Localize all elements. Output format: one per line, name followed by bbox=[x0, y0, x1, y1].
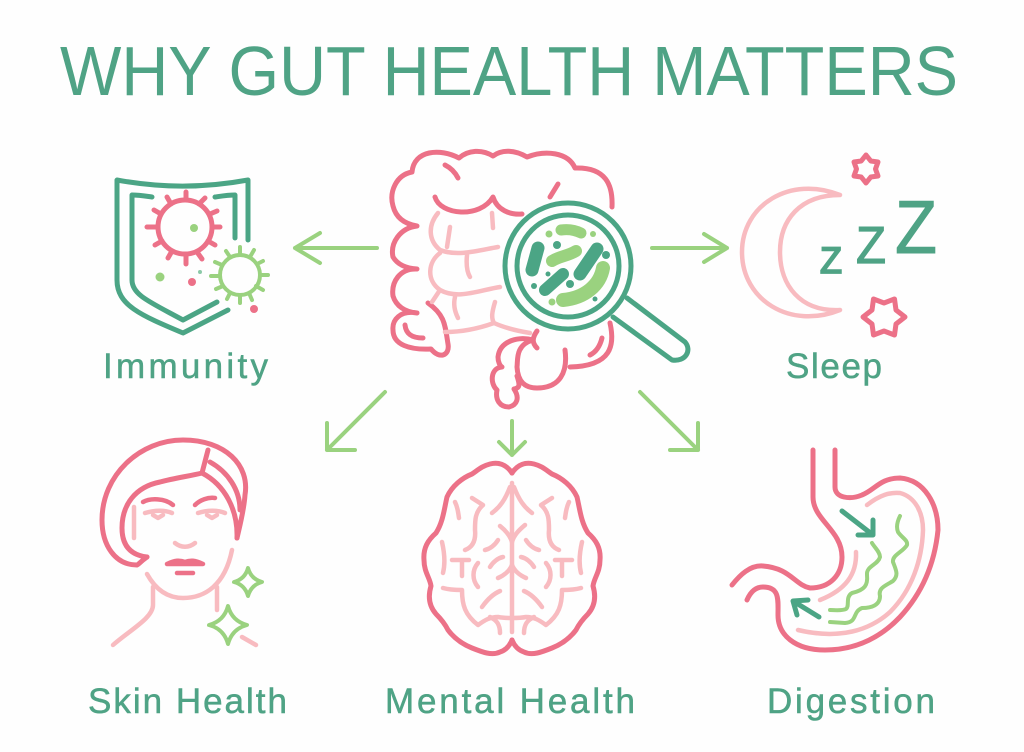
infection dots bbox=[156, 224, 258, 313]
star bottom bbox=[863, 299, 905, 335]
green waves bbox=[830, 516, 907, 623]
star top bbox=[854, 155, 878, 183]
large intestine outer outline bbox=[392, 151, 612, 407]
arrow: to digestion bbox=[640, 392, 698, 450]
label: Sleep: Sleep bbox=[786, 347, 882, 386]
small intestine inner folds bbox=[430, 213, 530, 333]
z letters: Z bbox=[820, 240, 842, 281]
bacteria bbox=[531, 230, 610, 306]
stomach inner lining bbox=[798, 493, 923, 634]
magnifying glass bbox=[505, 203, 688, 360]
icon: face for skin health bbox=[102, 440, 262, 645]
crescent moon bbox=[742, 189, 840, 316]
stomach outline bbox=[732, 450, 938, 650]
sparkles bbox=[209, 568, 262, 644]
icon: sleep moon, stars and z's bbox=[742, 155, 937, 335]
z letters bbox=[820, 185, 937, 281]
brows, nose and mouth bbox=[143, 498, 215, 573]
arrow: to sleep bbox=[652, 234, 727, 262]
label: Digestion: Digestion bbox=[767, 682, 935, 721]
pink virus bbox=[147, 192, 220, 264]
title: WHY GUT HEALTH MATTERS bbox=[60, 32, 958, 110]
green virus bbox=[211, 247, 268, 303]
brain folds bbox=[442, 483, 582, 633]
icon: immunity shield with viruses bbox=[117, 180, 268, 333]
z letters: Z bbox=[856, 217, 886, 275]
icon: brain for mental health bbox=[424, 463, 600, 654]
z letters: Z bbox=[895, 185, 937, 269]
shield outline bbox=[117, 180, 248, 333]
skin lines bbox=[113, 507, 256, 645]
digestion arrows bbox=[793, 511, 873, 617]
arrow: to mental health bbox=[499, 421, 525, 455]
arrow: to skin health bbox=[327, 392, 385, 450]
hair bbox=[102, 440, 246, 565]
label: Immunity: Immunity bbox=[103, 347, 268, 386]
arrow: to immunity bbox=[295, 233, 377, 263]
brain outline bbox=[424, 463, 600, 654]
icon: stomach for digestion bbox=[732, 450, 938, 650]
label: Skin Health: Skin Health bbox=[88, 682, 287, 721]
icon: intestine with magnifying glass bbox=[392, 151, 688, 407]
label: Mental Health: Mental Health bbox=[385, 682, 635, 721]
